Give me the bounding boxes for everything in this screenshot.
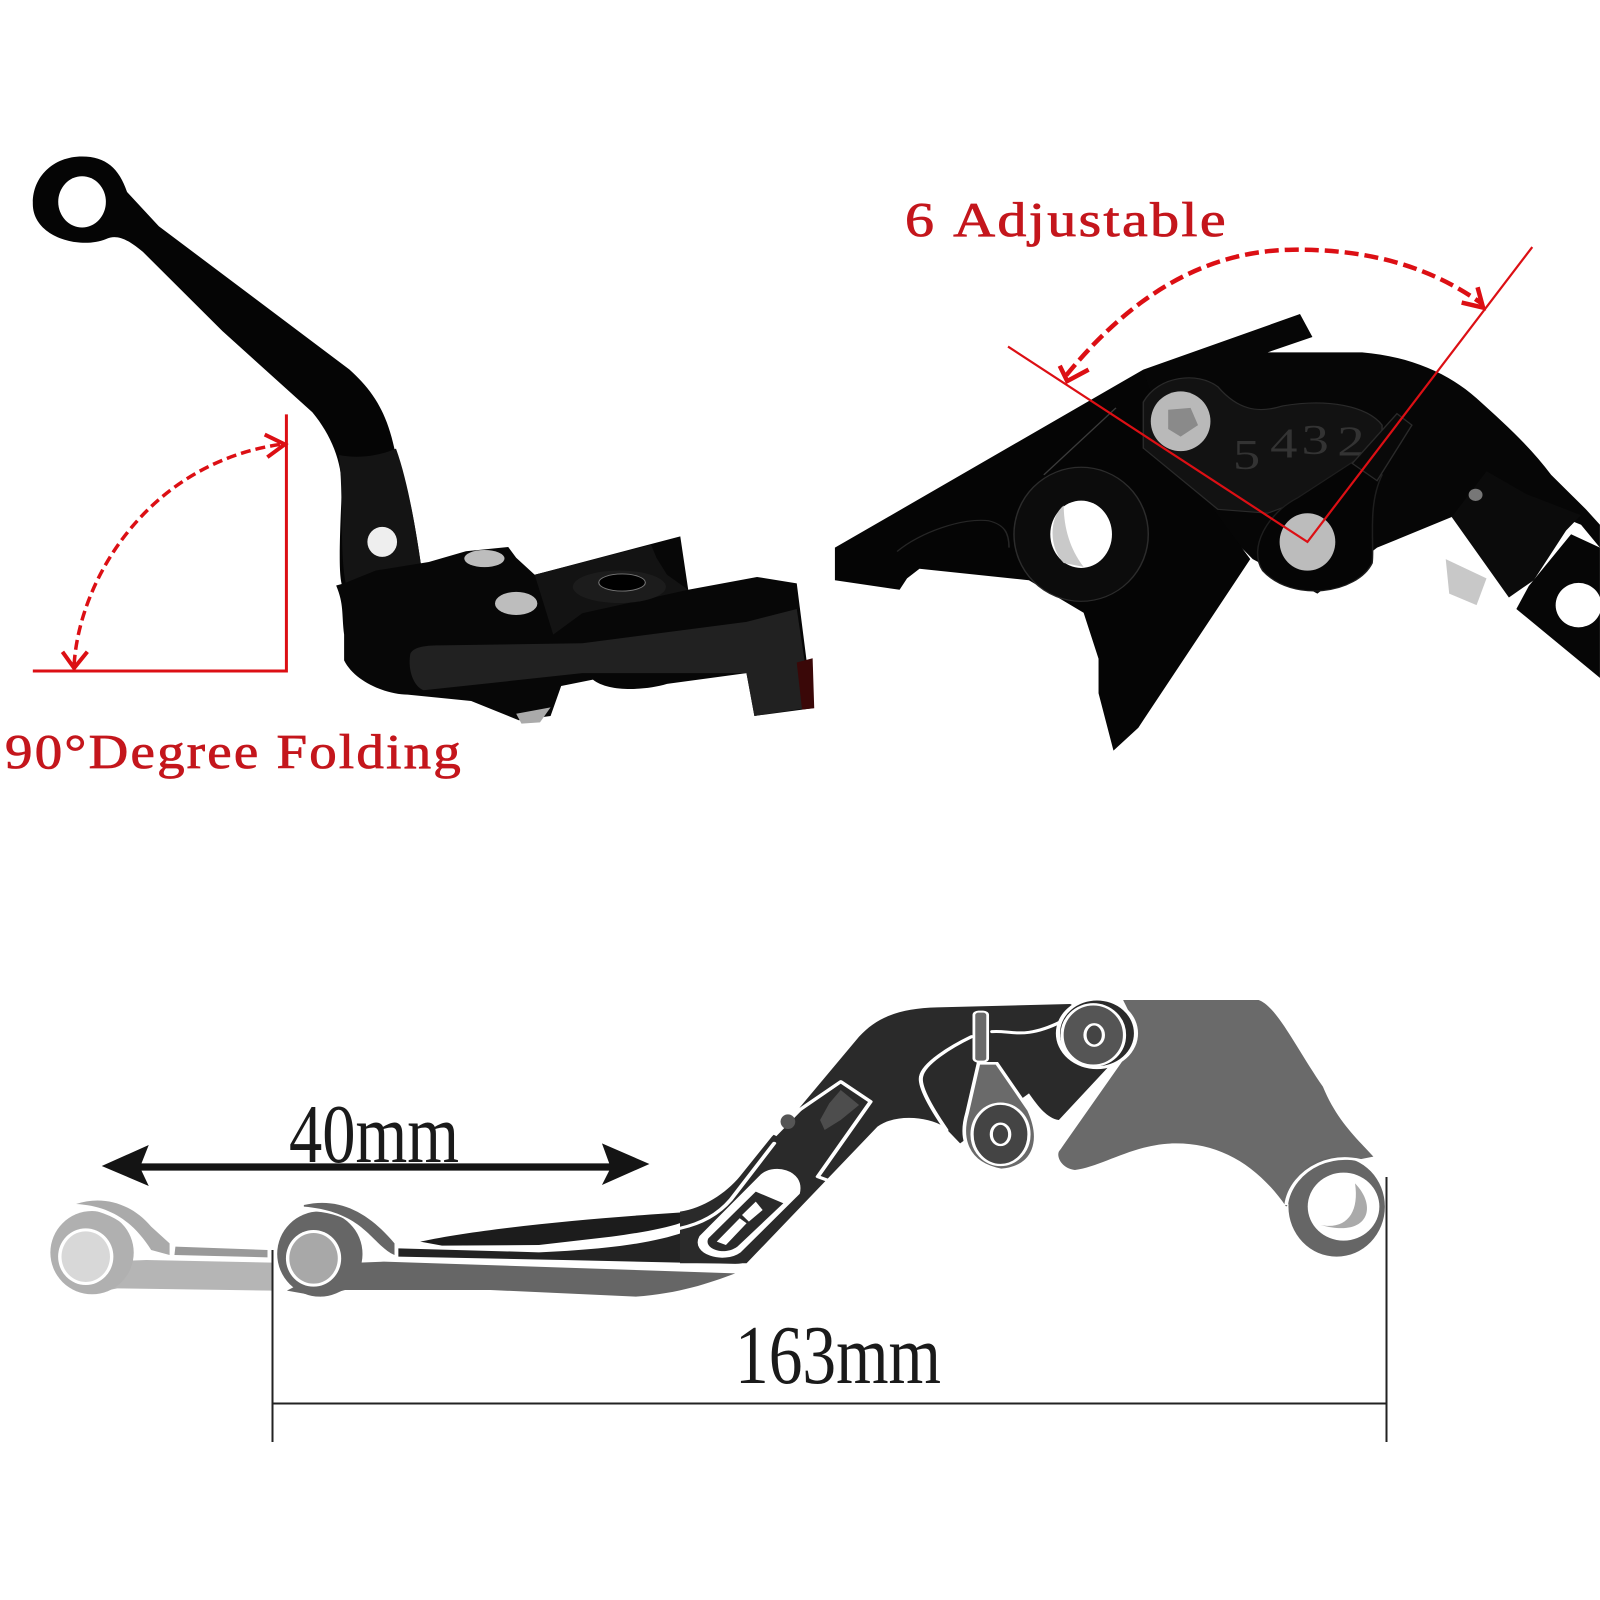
lever eye body	[277, 1211, 363, 1297]
perch hole	[1308, 1173, 1379, 1241]
perch eye arc	[1286, 1159, 1380, 1205]
link pin	[974, 1012, 988, 1062]
panel: extended lever outer blade	[277, 1203, 743, 1297]
red reflector tip	[797, 658, 814, 710]
washer socket	[599, 574, 645, 591]
ghost white arc	[76, 1207, 173, 1258]
angle marker: 90 degree lines and dashed arrow	[33, 414, 286, 671]
pivot base	[336, 536, 813, 720]
dial numbers: 2	[1337, 418, 1365, 465]
grey perch	[1058, 1000, 1373, 1207]
adjuster link	[1258, 456, 1382, 591]
black wedge lower	[398, 1217, 743, 1264]
panel: 90 degree folding lever photo	[33, 157, 814, 724]
arm lower facet	[339, 449, 421, 588]
pocket square	[820, 1090, 859, 1130]
washer ring	[1014, 467, 1148, 601]
ghost shank	[93, 1260, 272, 1293]
upper pivot	[1062, 1004, 1125, 1066]
black lever body	[680, 1004, 1114, 1263]
perch eye	[1288, 1157, 1385, 1257]
panel: retracted lever ghost position	[50, 1200, 272, 1294]
bolt stud	[516, 707, 551, 724]
white outline lines	[680, 1022, 1114, 1228]
perch edge line	[1044, 408, 1116, 475]
slot capsule	[699, 1170, 799, 1257]
dial numbers: 3	[1301, 416, 1329, 463]
lever eye hole	[58, 176, 106, 228]
upper pivot ring	[1085, 1024, 1103, 1046]
adjuster plate	[535, 545, 688, 635]
lower lever arm	[1516, 534, 1600, 678]
ghost blade	[174, 1247, 268, 1257]
lever eye rim	[286, 1230, 341, 1287]
slot inner dark	[708, 1192, 783, 1251]
ghost eye rim	[58, 1228, 113, 1285]
pocket highlight	[1469, 489, 1483, 501]
lever hole	[1556, 583, 1600, 627]
ghost eye inner	[62, 1231, 110, 1282]
folded lever arm	[33, 157, 421, 590]
small grip blob	[781, 1114, 795, 1129]
hole inner wall	[1053, 506, 1084, 567]
screw bottom	[495, 592, 537, 615]
dial numbers: 4	[1270, 420, 1297, 467]
dial numbers	[1233, 416, 1365, 479]
lever eye inner	[289, 1233, 338, 1284]
lever cap	[304, 1203, 394, 1255]
lever and body silhouette	[1143, 314, 1600, 594]
link pivot ring	[991, 1124, 1010, 1145]
caption: 90 degree folding: 90°Degree Folding	[5, 724, 463, 779]
lower perch body	[410, 609, 812, 716]
panel: 6 adjustable lever photo	[835, 314, 1600, 751]
link pivot	[972, 1104, 1029, 1165]
panel: extended lever diagram	[680, 999, 1385, 1263]
slot teeth	[717, 1202, 763, 1245]
caption: 6 adjustable: 6 Adjustable	[905, 192, 1228, 247]
adjuster knob	[1352, 414, 1412, 481]
upper screw	[1151, 391, 1210, 451]
cam plate	[1143, 378, 1382, 513]
white gap and blob	[774, 1108, 800, 1135]
ghost eye body	[50, 1211, 134, 1294]
upper pivot outer	[1058, 999, 1136, 1068]
black wedge upper	[420, 1207, 709, 1246]
clamp bracket	[1452, 471, 1581, 597]
dial numbers: 5	[1233, 431, 1260, 479]
arm pivot hole	[367, 527, 397, 557]
angle marker: adjustment lines and dashed arrow	[1008, 247, 1532, 542]
perch mount hole	[1050, 501, 1112, 568]
perch inner notch line	[897, 520, 1009, 552]
dimension label: 40mm: 40mm	[289, 1088, 459, 1181]
plate washer	[573, 571, 666, 603]
ghost cap	[76, 1200, 170, 1255]
lever grey shank	[287, 1262, 735, 1297]
lever white arc	[304, 1209, 401, 1259]
pivot screw	[1280, 513, 1335, 571]
perch hole crescent	[1321, 1183, 1367, 1228]
dimension label: 163mm: 163mm	[735, 1309, 941, 1402]
teardrop link	[964, 1063, 1036, 1170]
upper screw socket	[1168, 408, 1198, 437]
screw top	[464, 550, 505, 567]
fixed perch	[835, 370, 1250, 751]
dimension: 163mm bracket	[272, 1177, 1386, 1442]
adjuster bolt	[1446, 559, 1487, 605]
dimension: 40mm arrow	[102, 1143, 649, 1186]
